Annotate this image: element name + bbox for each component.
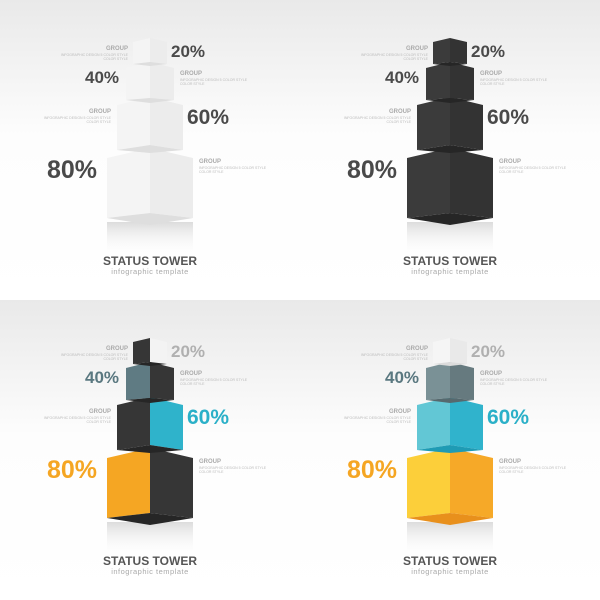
group text 4: GROUP (499, 159, 521, 165)
group text 3 (44, 109, 112, 124)
cube: 80% (407, 448, 493, 525)
label: 60%: 60% (187, 106, 229, 129)
group text 3: COLOR STYLE (386, 420, 412, 424)
group text 4: INFOGRAPHIC DESIGN 5 COLOR STYLE (499, 166, 567, 170)
cube: 40% (426, 362, 474, 403)
panel: mixed colour tower (0, 300, 300, 600)
cube: 40% (126, 362, 174, 403)
group text 3 (344, 109, 412, 124)
group text 4: COLOR STYLE (199, 170, 224, 174)
group text 4: GROUP (199, 159, 221, 165)
cube: 60% (417, 397, 483, 453)
label: 40%: 40% (85, 68, 119, 87)
group text 2 (180, 71, 248, 86)
label: 40%: 40% (85, 368, 119, 387)
group text 1: GROUP (106, 346, 128, 352)
group text 1: COLOR STYLE (103, 357, 129, 361)
panel: white tower (0, 0, 300, 300)
group text 2: INFOGRAPHIC DESIGN 5 COLOR STYLE (180, 378, 248, 382)
label: 60%: 60% (487, 406, 529, 429)
group text 1 (61, 346, 129, 361)
label: 20%: 20% (171, 42, 205, 61)
group text 4 (499, 159, 567, 174)
group text 1: INFOGRAPHIC DESIGN 5 COLOR STYLE (361, 53, 429, 57)
cube: 40% (426, 62, 474, 103)
panel: full colour tower (300, 300, 600, 600)
group text 3: GROUP (89, 409, 111, 415)
group text 4: GROUP (499, 459, 521, 465)
label: 60%: 60% (187, 406, 229, 429)
group text 4: COLOR STYLE (199, 470, 224, 474)
label: 40%: 40% (385, 368, 419, 387)
label: 20%: 20% (171, 342, 205, 361)
group text 3 (344, 409, 412, 424)
cube: 80% (107, 448, 193, 525)
group text 2: GROUP (180, 371, 202, 377)
group text 1: INFOGRAPHIC DESIGN 5 COLOR STYLE (61, 53, 129, 57)
title (103, 554, 197, 576)
label: 20%: 20% (471, 342, 505, 361)
label: 40%: 40% (385, 68, 419, 87)
group text 1: INFOGRAPHIC DESIGN 5 COLOR STYLE (61, 353, 129, 357)
group text 2: INFOGRAPHIC DESIGN 5 COLOR STYLE (480, 78, 548, 82)
group text 1: INFOGRAPHIC DESIGN 5 COLOR STYLE (361, 353, 429, 357)
title: infographic template (111, 567, 189, 576)
cube: 20% (433, 338, 467, 366)
label: 60%: 60% (487, 106, 529, 129)
group text 3 (44, 409, 112, 424)
group text 4: INFOGRAPHIC DESIGN 5 COLOR STYLE (199, 466, 267, 470)
cube: 60% (417, 97, 483, 153)
group text 2: GROUP (180, 71, 202, 77)
label: 20%: 20% (471, 42, 505, 61)
cube: 80% (407, 148, 493, 225)
title: STATUS TOWER (403, 254, 497, 268)
group text 2: COLOR STYLE (180, 82, 205, 86)
group text 4 (499, 459, 567, 474)
group text 2: GROUP (480, 371, 502, 377)
cube: 20% (433, 38, 467, 66)
group text 2: COLOR STYLE (180, 382, 205, 386)
title: STATUS TOWER (403, 554, 497, 568)
title: infographic template (111, 267, 189, 276)
group text 1: COLOR STYLE (103, 57, 129, 61)
group text 4: COLOR STYLE (499, 470, 524, 474)
group text 3: COLOR STYLE (386, 120, 412, 124)
group text 2: COLOR STYLE (480, 382, 505, 386)
group text 4: INFOGRAPHIC DESIGN 5 COLOR STYLE (499, 466, 567, 470)
group text 1: GROUP (406, 346, 428, 352)
group text 1: COLOR STYLE (403, 57, 429, 61)
title: infographic template (411, 267, 489, 276)
title (103, 254, 197, 276)
group text 3: COLOR STYLE (86, 120, 112, 124)
group text 3: INFOGRAPHIC DESIGN 5 COLOR STYLE (344, 416, 412, 420)
group text 1: COLOR STYLE (403, 357, 429, 361)
group text 1 (361, 46, 429, 61)
group text 2 (480, 71, 548, 86)
group text 4: COLOR STYLE (499, 170, 524, 174)
group text 3: COLOR STYLE (86, 420, 112, 424)
title: STATUS TOWER (103, 554, 197, 568)
group text 1: GROUP (106, 46, 128, 52)
group text 1 (61, 46, 129, 61)
label: 80%: 80% (47, 156, 97, 184)
group text 2: COLOR STYLE (480, 82, 505, 86)
group text 3: INFOGRAPHIC DESIGN 5 COLOR STYLE (44, 416, 112, 420)
label: 80%: 80% (347, 456, 397, 484)
title: STATUS TOWER (103, 254, 197, 268)
title (403, 254, 497, 276)
group text 4 (199, 459, 267, 474)
group text 4: GROUP (199, 459, 221, 465)
panel: dark tower (300, 0, 600, 300)
group text 3: GROUP (389, 109, 411, 115)
group text 2: GROUP (480, 71, 502, 77)
group text 2: INFOGRAPHIC DESIGN 5 COLOR STYLE (180, 78, 248, 82)
title (403, 554, 497, 576)
group text 3: INFOGRAPHIC DESIGN 5 COLOR STYLE (344, 116, 412, 120)
group text 2 (480, 371, 548, 386)
group text 2 (180, 371, 248, 386)
group text 3: GROUP (389, 409, 411, 415)
group text 3: INFOGRAPHIC DESIGN 5 COLOR STYLE (44, 116, 112, 120)
group text 4: INFOGRAPHIC DESIGN 5 COLOR STYLE (199, 166, 267, 170)
group text 1: GROUP (406, 46, 428, 52)
cube: 40% (126, 62, 174, 103)
cube: 60% (117, 97, 183, 153)
label: 80%: 80% (47, 456, 97, 484)
title: infographic template (411, 567, 489, 576)
cube: 80% (107, 148, 193, 225)
group text 3: GROUP (89, 109, 111, 115)
cube: 20% (133, 338, 167, 366)
group text 1 (361, 346, 429, 361)
group text 4 (199, 159, 267, 174)
cube: 20% (133, 38, 167, 66)
label: 80%: 80% (347, 156, 397, 184)
cube: 60% (117, 397, 183, 453)
group text 2: INFOGRAPHIC DESIGN 5 COLOR STYLE (480, 378, 548, 382)
